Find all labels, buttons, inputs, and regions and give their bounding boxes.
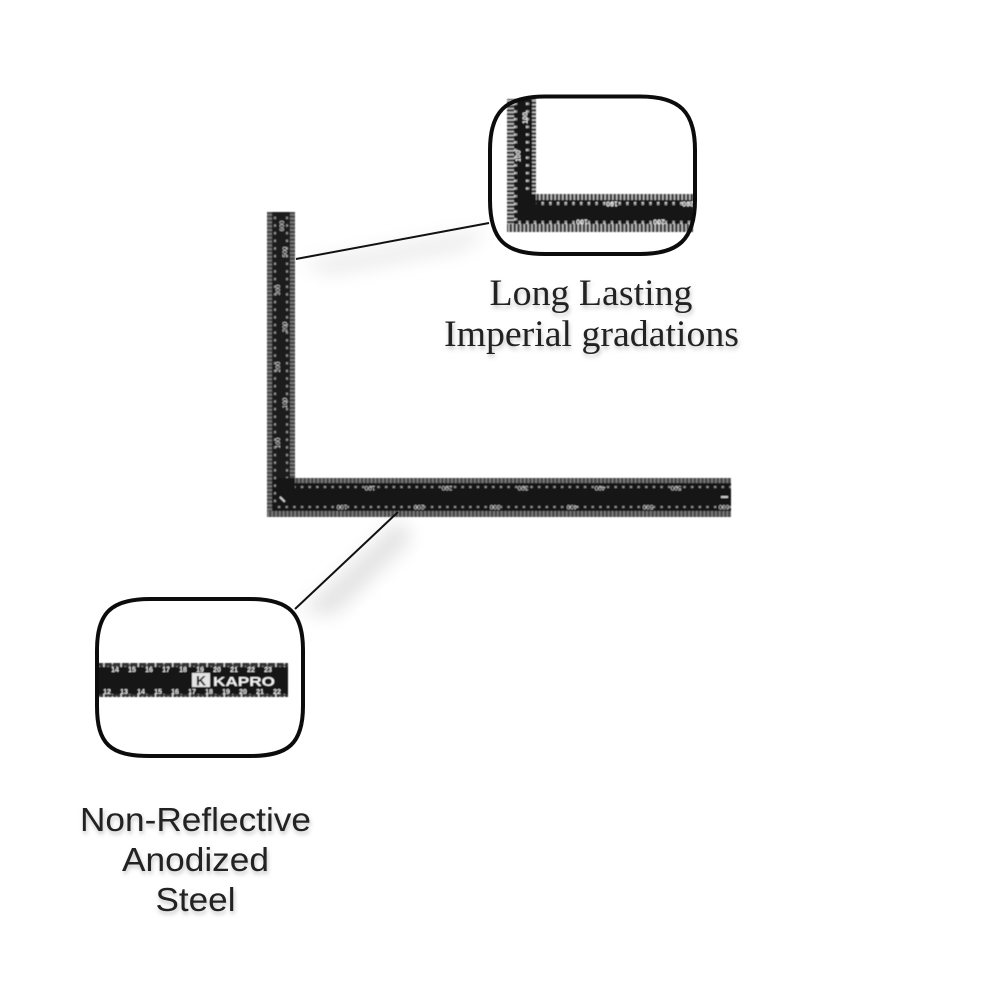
inset ruler strip: 15 <box>128 667 136 674</box>
inset ruler corner: 200 <box>653 218 665 224</box>
inset ruler corner: 100 <box>606 200 618 206</box>
caption: Non-Reflective Anodized Steel: Steel <box>156 884 236 921</box>
horizontal arm: 400 <box>594 484 605 491</box>
inset ruler corner: 200 <box>682 200 694 206</box>
horizontal arm: 400 <box>566 503 577 510</box>
inset ruler strip: 21 <box>256 689 264 696</box>
inset ruler strip: 21 <box>230 667 238 674</box>
inset ruler strip: 17 <box>188 689 196 696</box>
vertical arm: 100 <box>282 397 289 408</box>
vertical arm: 100 <box>275 437 282 448</box>
caption: Non-Reflective Anodized Steel: Steel <box>156 881 236 918</box>
horizontal arm: 300 <box>517 484 528 491</box>
horizontal arm: 500 <box>642 503 653 510</box>
callout line: top inset <box>296 223 489 259</box>
inset ruler corner <box>507 99 694 232</box>
caption: Non-Reflective Anodized Steel: Anodized <box>123 844 270 881</box>
inset ruler strip: 17 <box>162 667 170 674</box>
inset ruler strip: 20 <box>213 667 221 674</box>
inset ruler corner: 100 <box>576 218 588 224</box>
vertical arm: 300 <box>275 284 282 295</box>
inset ruler strip: 22 <box>247 667 255 674</box>
horizontal arm: 100 <box>364 484 375 491</box>
carpenter square ruler <box>267 212 731 517</box>
caption: Non-Reflective Anodized Steel <box>80 801 312 921</box>
inset ruler strip: 16 <box>145 667 153 674</box>
horizontal arm: 600 <box>718 503 729 510</box>
inset ruler strip: 13 <box>120 689 128 696</box>
Kapro logo: KAPRO <box>213 674 275 689</box>
inset ruler strip: 18 <box>205 689 213 696</box>
vertical arm: 200 <box>282 321 289 332</box>
inset ruler strip: 15 <box>154 689 162 696</box>
inset frame <box>490 96 695 254</box>
horizontal arm: 200 <box>413 503 424 510</box>
inset frame <box>97 599 303 756</box>
inset ruler strip: 19 <box>222 689 230 696</box>
caption: Long Lasting Imperial gradations: Long Lasting <box>490 276 694 317</box>
inset ruler strip: 22 <box>273 689 281 696</box>
inset ruler strip: 12 <box>103 689 111 696</box>
horizontal arm: 300 <box>489 503 500 510</box>
caption: Long Lasting Imperial gradations <box>444 273 740 358</box>
horizontal arm <box>267 478 731 517</box>
caption: Non-Reflective Anodized Steel: Non-Reflective <box>80 801 311 838</box>
Kapro logo <box>192 672 275 689</box>
callout line shadows <box>300 228 489 615</box>
caption: Long Lasting Imperial gradations: Imperial gradations <box>444 314 739 355</box>
vertical arm: 600 <box>279 220 286 231</box>
inset: Kapro logo close-up <box>97 599 303 756</box>
inset ruler strip: 14 <box>137 689 145 696</box>
vertical arm <box>267 212 295 517</box>
inset ruler strip: 20 <box>239 689 247 696</box>
inset ruler strip: 14 <box>111 667 119 674</box>
vertical arm: 500 <box>282 246 289 257</box>
inset ruler strip: 18 <box>179 667 187 674</box>
horizontal arm: 200 <box>441 484 452 491</box>
Kapro logo: K <box>196 672 206 688</box>
caption: Non-Reflective Anodized Steel: Non-Reflective <box>81 804 312 841</box>
caption: Long Lasting Imperial gradations: Imperial gradations <box>445 317 740 358</box>
inset ruler strip: 19 <box>196 667 204 674</box>
caption: Long Lasting Imperial gradations: Long Lasting <box>490 273 692 314</box>
vertical arm: 200 <box>275 361 282 372</box>
inset ruler strip: 16 <box>171 689 179 696</box>
inset ruler strip: 23 <box>264 667 272 674</box>
horizontal arm: 100 <box>336 503 347 510</box>
horizontal arm: 500 <box>670 484 681 491</box>
caption: Non-Reflective Anodized Steel: Anodized <box>122 841 269 878</box>
inset: imperial gradations close-up <box>490 96 695 254</box>
inset ruler corner: 100 <box>522 112 530 124</box>
inset ruler corner: 100 <box>516 150 522 162</box>
callout line: bottom inset <box>295 512 398 609</box>
inset ruler strip <box>98 663 288 697</box>
